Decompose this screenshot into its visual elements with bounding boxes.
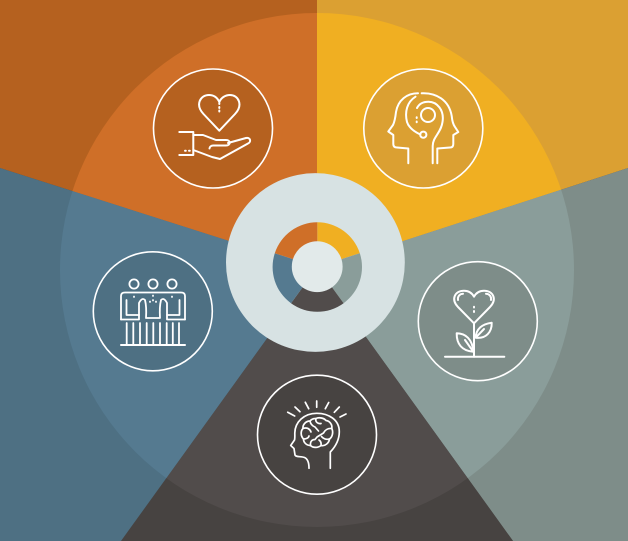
icon: head with brain	[258, 375, 376, 494]
inner large circle sectors	[60, 13, 574, 527]
icon: heart in hand	[154, 69, 272, 188]
center small donut	[273, 222, 362, 312]
icon: two heads	[364, 69, 483, 188]
icon: heart plant	[418, 262, 537, 381]
icon: three people	[93, 252, 212, 371]
center ring	[226, 173, 405, 352]
